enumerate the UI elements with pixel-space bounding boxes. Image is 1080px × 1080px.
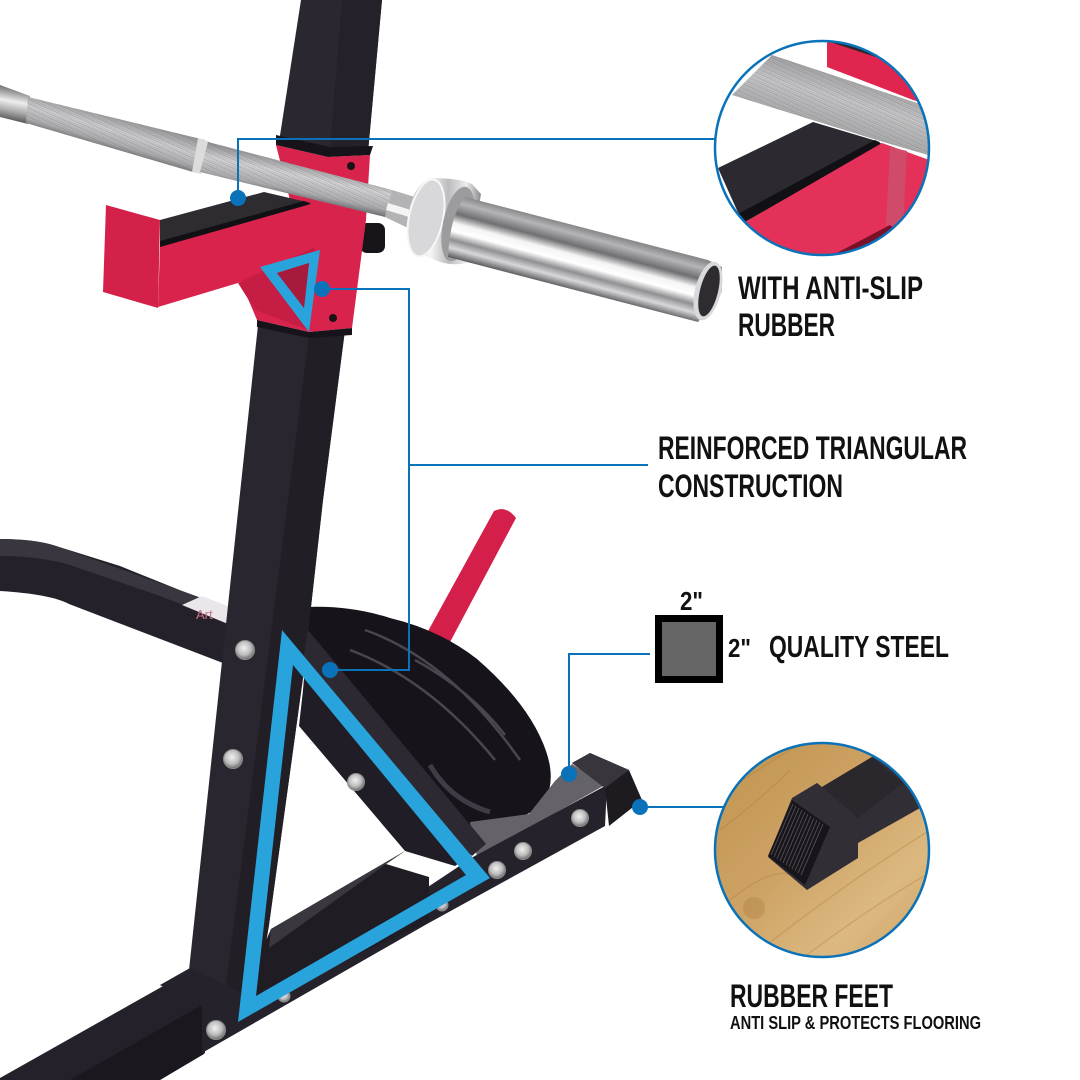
smooth neck xyxy=(385,190,415,228)
red peg xyxy=(427,509,516,644)
weld xyxy=(886,147,907,228)
label: reinforced construction xyxy=(658,430,967,504)
label: quality steel: QUALITY STEEL xyxy=(769,629,949,664)
rubber end cap xyxy=(572,753,642,826)
icon: 2 inch square tube: 2" xyxy=(728,633,751,663)
foot xyxy=(768,756,920,890)
wood grain xyxy=(715,745,935,960)
top and bottom black caps xyxy=(276,135,373,157)
icon: 2 inch square tube: 2" xyxy=(680,586,703,616)
label: anti-slip rubber: WITH ANTI-SLIP xyxy=(738,270,923,306)
label: rubber feet: RUBBER FEET xyxy=(730,978,893,1014)
red arm xyxy=(745,143,935,260)
diagonal brace xyxy=(299,630,486,866)
black knob behind sleeve xyxy=(360,223,385,253)
plate body xyxy=(305,607,551,830)
callout dots xyxy=(230,190,648,815)
small blue triangle xyxy=(260,250,320,332)
icon: 2 inch square tube xyxy=(658,586,751,680)
base rail with end cap xyxy=(0,753,642,1080)
sleeve xyxy=(240,145,370,332)
upper upright post xyxy=(279,0,382,152)
ring xyxy=(192,138,210,174)
large blue triangle xyxy=(238,630,490,1022)
left shaft xyxy=(0,85,30,124)
barbell xyxy=(0,85,728,323)
arm top rubber xyxy=(160,192,311,247)
label: anti-slip rubber xyxy=(738,270,923,343)
arm side xyxy=(158,204,318,307)
label: rubber feet xyxy=(730,978,981,1033)
bolts xyxy=(206,640,588,1040)
callout lines xyxy=(238,139,725,807)
curved rear bar xyxy=(0,539,240,668)
gusset xyxy=(238,247,315,330)
label: reinforced construction: REINFORCED TRIANGULAR xyxy=(658,430,967,466)
black rubber pad xyxy=(718,122,880,217)
red upright xyxy=(827,42,917,102)
plate highlights xyxy=(350,630,520,760)
front tube xyxy=(0,985,205,1080)
holes xyxy=(347,162,355,170)
collar xyxy=(408,178,481,264)
detail circle: anti-slip rubber xyxy=(715,40,935,262)
end plate xyxy=(103,205,160,308)
inner rail xyxy=(256,851,429,1000)
sleeve xyxy=(448,197,722,322)
red J-hook xyxy=(103,135,373,338)
knurled section left xyxy=(26,97,205,172)
lower upright post xyxy=(189,325,345,1005)
label: rubber feet: ANTI SLIP & PROTECTS FLOORING xyxy=(730,1013,981,1033)
weight plate with red peg xyxy=(305,509,551,830)
dark red underside xyxy=(837,225,892,253)
detail circle: rubber foot xyxy=(715,743,935,960)
knurled section right xyxy=(200,142,392,217)
sleeve and main rail xyxy=(160,785,607,1053)
label: anti-slip rubber: RUBBER xyxy=(738,307,835,343)
curved rear bar: Art xyxy=(196,607,213,622)
label: reinforced construction: CONSTRUCTION xyxy=(658,468,843,504)
grey top face xyxy=(470,764,605,857)
end cap xyxy=(688,259,728,323)
grill xyxy=(768,800,830,885)
knurled bar xyxy=(732,55,935,157)
